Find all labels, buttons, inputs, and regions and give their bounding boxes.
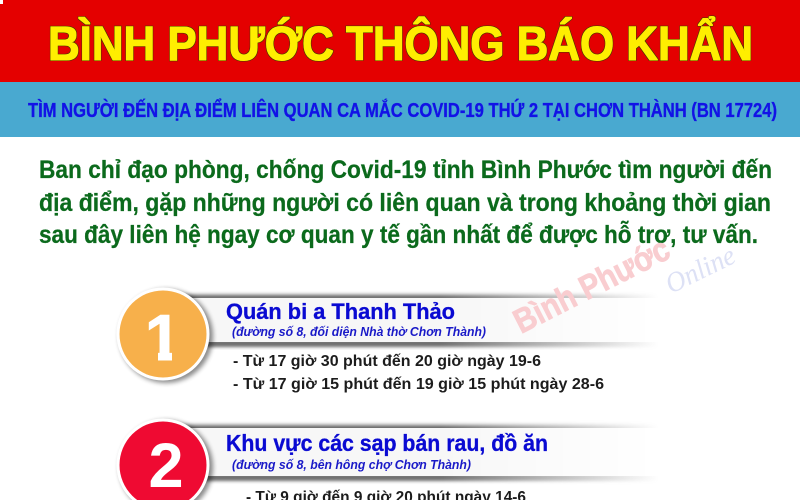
item 2 banner: [180, 423, 700, 481]
watermark: Bình Phước: [507, 230, 676, 341]
item 1 banner: [180, 293, 700, 347]
item 1 times: [233, 353, 604, 393]
item 1 number badge: [116, 288, 213, 383]
item 1 times: - Từ 17 giờ 30 phút đến 20 giờ ngày 19-6: [233, 353, 541, 370]
header band: red title: [0, 0, 800, 82]
subtitle band: [0, 82, 800, 137]
item 1 address: (đường số 8, đối diện Nhà thờ Chơn Thành): [232, 325, 486, 339]
item 2 heading: Khu vực các sạp bán rau, đồ ăn: [226, 430, 548, 456]
item 1 number badge: 1: [145, 301, 181, 374]
item 1 times: - Từ 17 giờ 15 phút đến 19 giờ 15 phút ngày 28-6: [233, 376, 604, 393]
title: BÌNH PHƯỚC THÔNG BÁO KHẨN: [48, 16, 753, 71]
item 2 number badge: [116, 418, 213, 500]
item 2 heading: [226, 430, 548, 472]
item 1 heading: [226, 299, 486, 339]
item 2 address: (đường số 8, bên hông chợ Chơn Thành): [232, 458, 471, 472]
watermark: Online: [660, 240, 741, 300]
item 2 number badge: 2: [148, 431, 184, 500]
intro text block: [39, 156, 772, 249]
item 1 heading: Quán bi a Thanh Thảo: [226, 299, 455, 324]
